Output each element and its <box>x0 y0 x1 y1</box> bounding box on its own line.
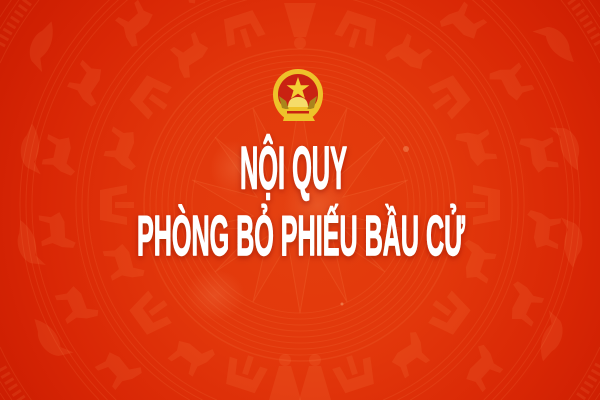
emblem red field <box>278 74 318 106</box>
emblem gold wreath <box>273 69 323 118</box>
emblem star <box>287 77 309 99</box>
emblem gear <box>288 97 308 107</box>
title <box>137 134 465 268</box>
title: NỘI QUY <box>240 134 347 202</box>
icon: national emblem <box>273 69 323 121</box>
drum star <box>192 97 408 313</box>
figures band <box>100 3 500 400</box>
light glows <box>185 140 409 321</box>
emblem ribbon <box>283 109 315 121</box>
